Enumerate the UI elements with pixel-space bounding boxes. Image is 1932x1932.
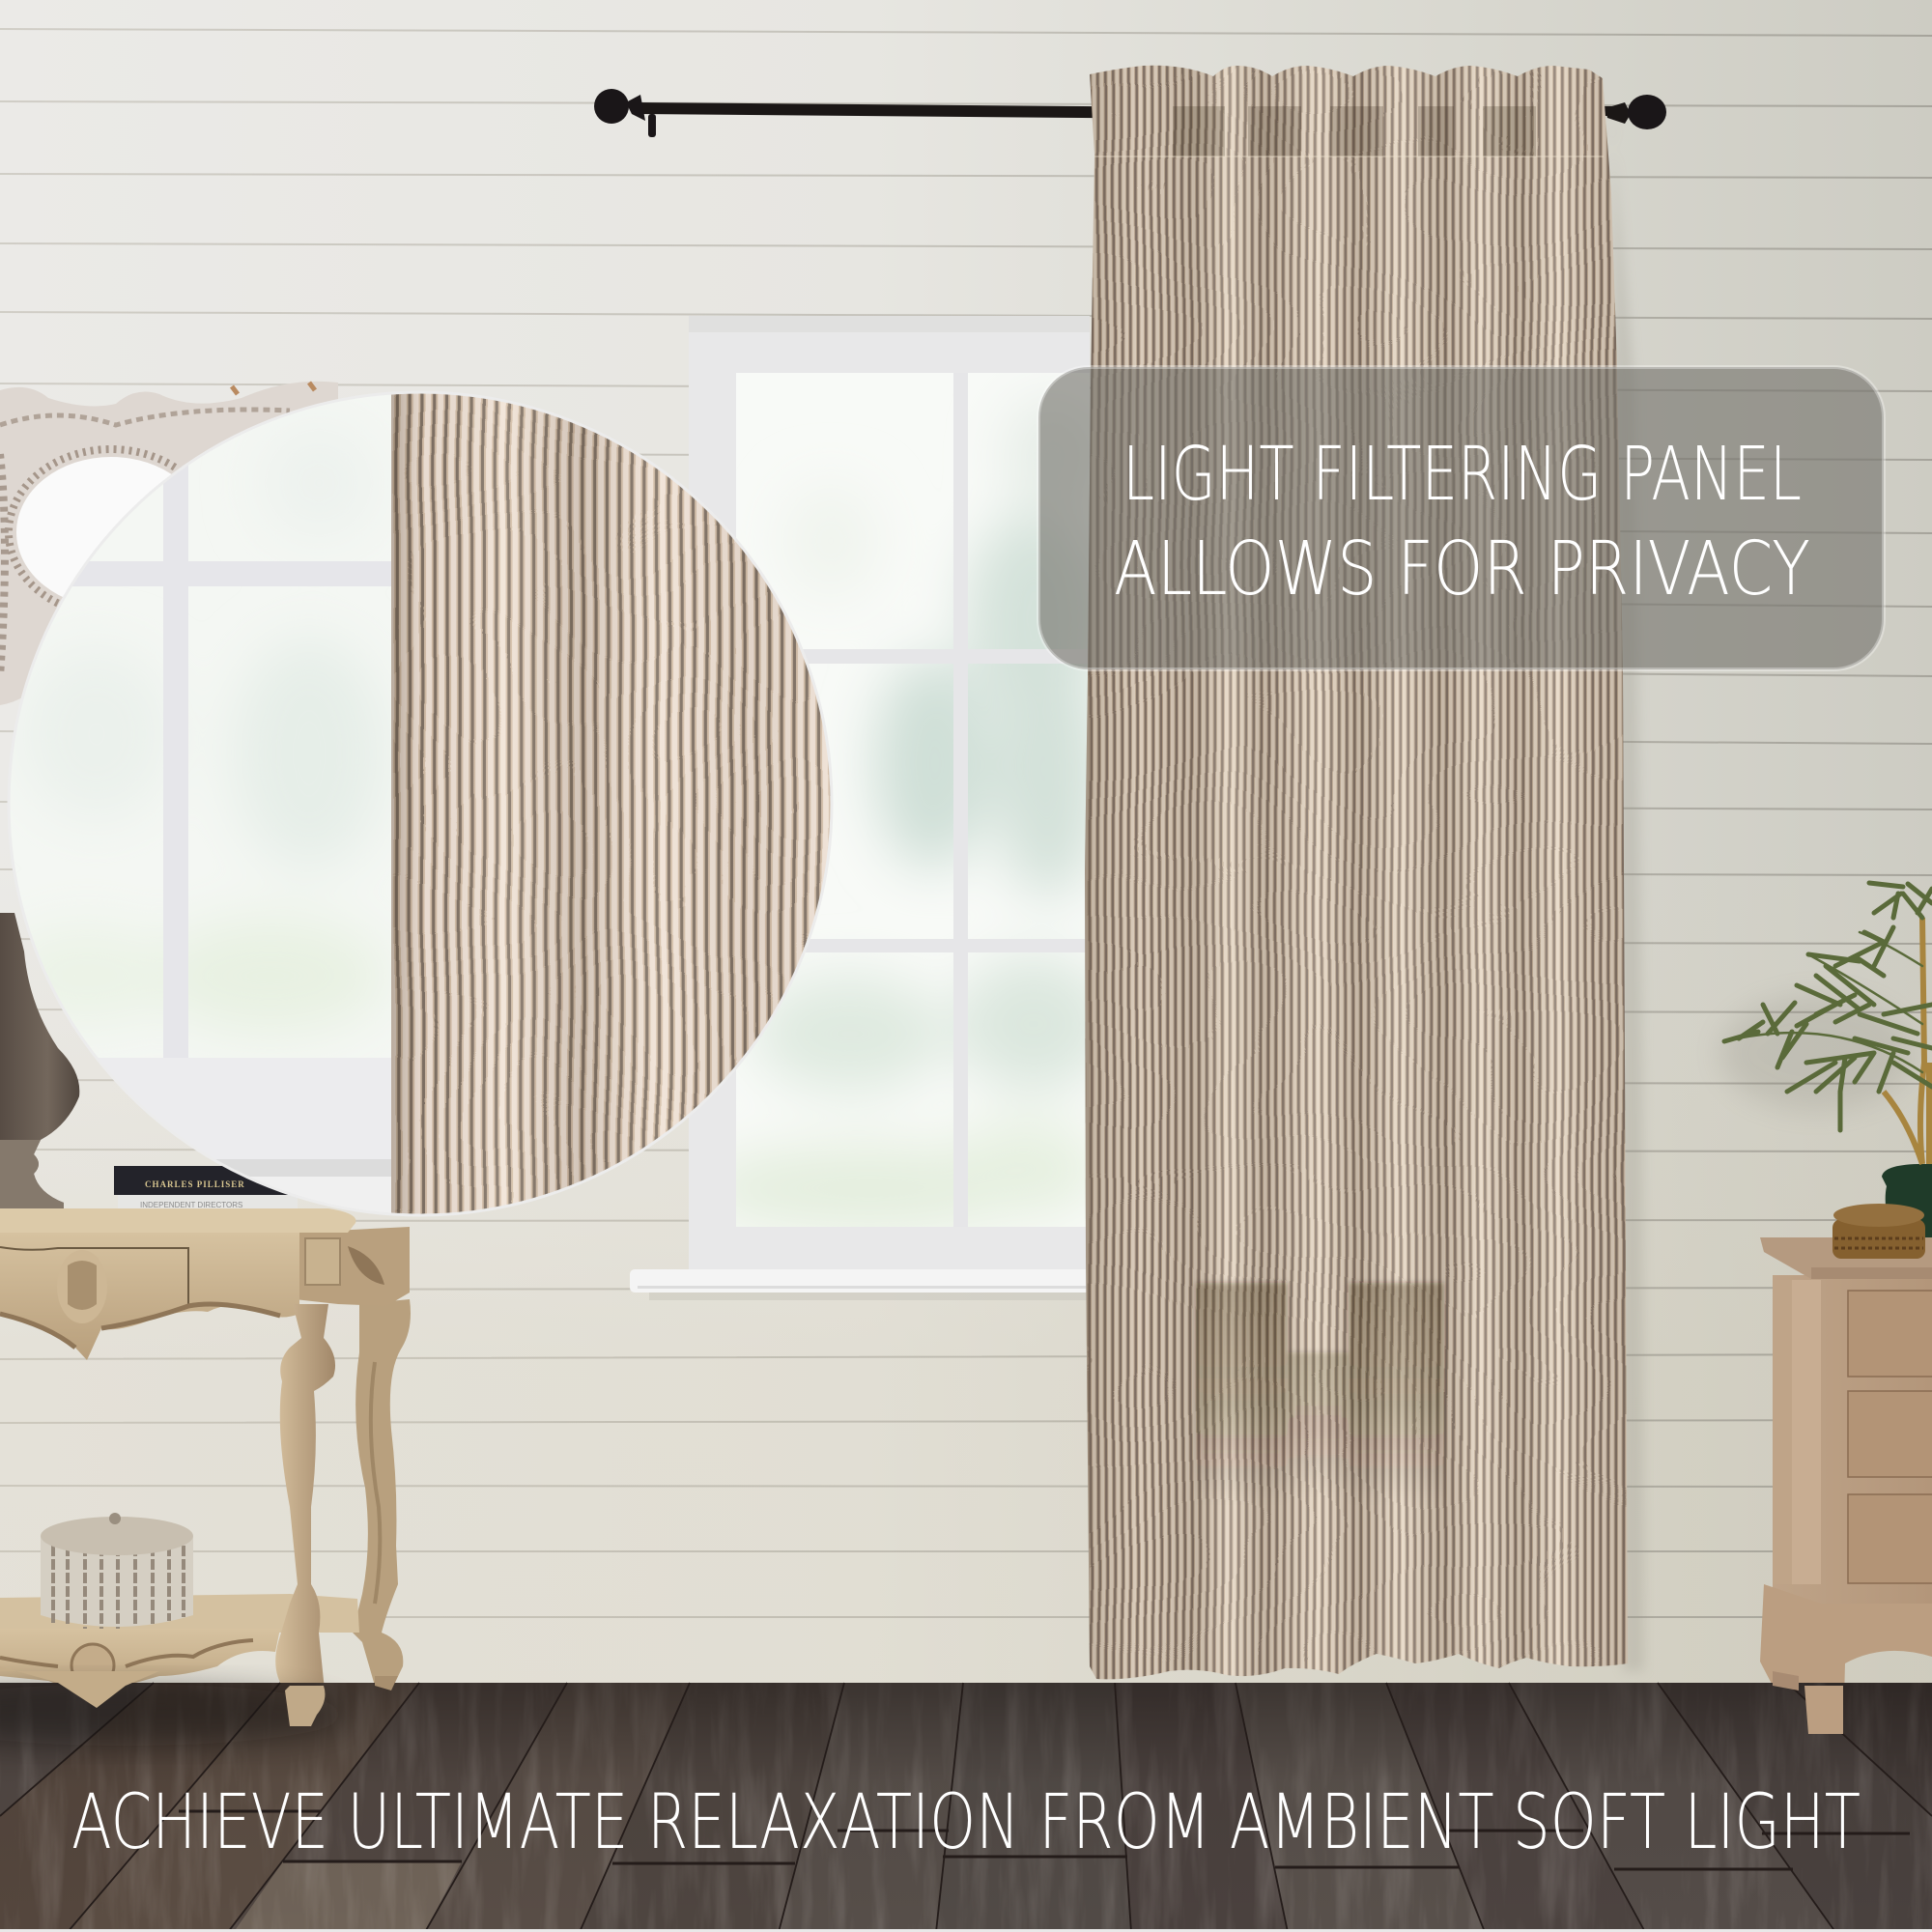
magnified curtain fabric <box>391 394 831 1213</box>
ticking stripes <box>1085 66 1628 1679</box>
magnifier circle <box>0 367 855 1236</box>
magnified window view <box>0 386 396 1220</box>
window glass with blurred trees <box>736 373 1087 1227</box>
callout text <box>1114 432 1810 612</box>
left finial <box>594 89 656 137</box>
woven basket <box>1833 1204 1925 1259</box>
stacked books: CHARLES PILLISER <box>145 1179 245 1189</box>
potted plant <box>1719 883 1932 1252</box>
translucent callout panel <box>1038 367 1884 669</box>
window frame <box>689 316 1090 1272</box>
table front leg <box>275 1304 335 1726</box>
curtain wall shadow <box>1611 126 1644 1671</box>
magnifier rim <box>9 392 832 1215</box>
ornate mirror <box>0 382 338 705</box>
chest of drawers <box>1760 1204 1932 1734</box>
floor planks <box>0 1683 1932 1932</box>
table shelf <box>0 1594 359 1708</box>
wooden floor <box>0 1683 1932 1932</box>
bamboo leaves <box>1724 883 1932 1130</box>
callout text: ALLOWS FOR PRIVACY <box>1114 526 1810 612</box>
curtain panel <box>1085 66 1628 1679</box>
right finial <box>1594 95 1666 129</box>
table lamp <box>0 913 79 1209</box>
rod pocket shadows <box>1173 106 1536 156</box>
window <box>630 316 1111 1300</box>
magnified frame and sill <box>99 1058 391 1159</box>
curtain rod <box>594 89 1666 137</box>
table back leg <box>353 1299 411 1690</box>
textured round box <box>41 1513 193 1629</box>
console table <box>0 1208 411 1726</box>
stacked books <box>114 1166 298 1212</box>
magnified mullions <box>72 466 391 1058</box>
dark outer edges <box>1085 618 1090 1654</box>
stacked books: INDEPENDENT DIRECTORS <box>140 1201 242 1209</box>
plant pot <box>1882 1164 1932 1252</box>
window sill <box>630 1269 1090 1300</box>
drawer fronts <box>1848 1291 1932 1583</box>
fold shading <box>1085 66 1628 1679</box>
plank seams <box>0 1683 1932 1932</box>
sill shadow through fabric <box>1196 1283 1444 1505</box>
window mullions <box>736 373 1090 1227</box>
table top and apron <box>0 1208 410 1360</box>
dresser legs <box>1760 1584 1932 1734</box>
table legs over floor <box>0 1666 1843 1734</box>
